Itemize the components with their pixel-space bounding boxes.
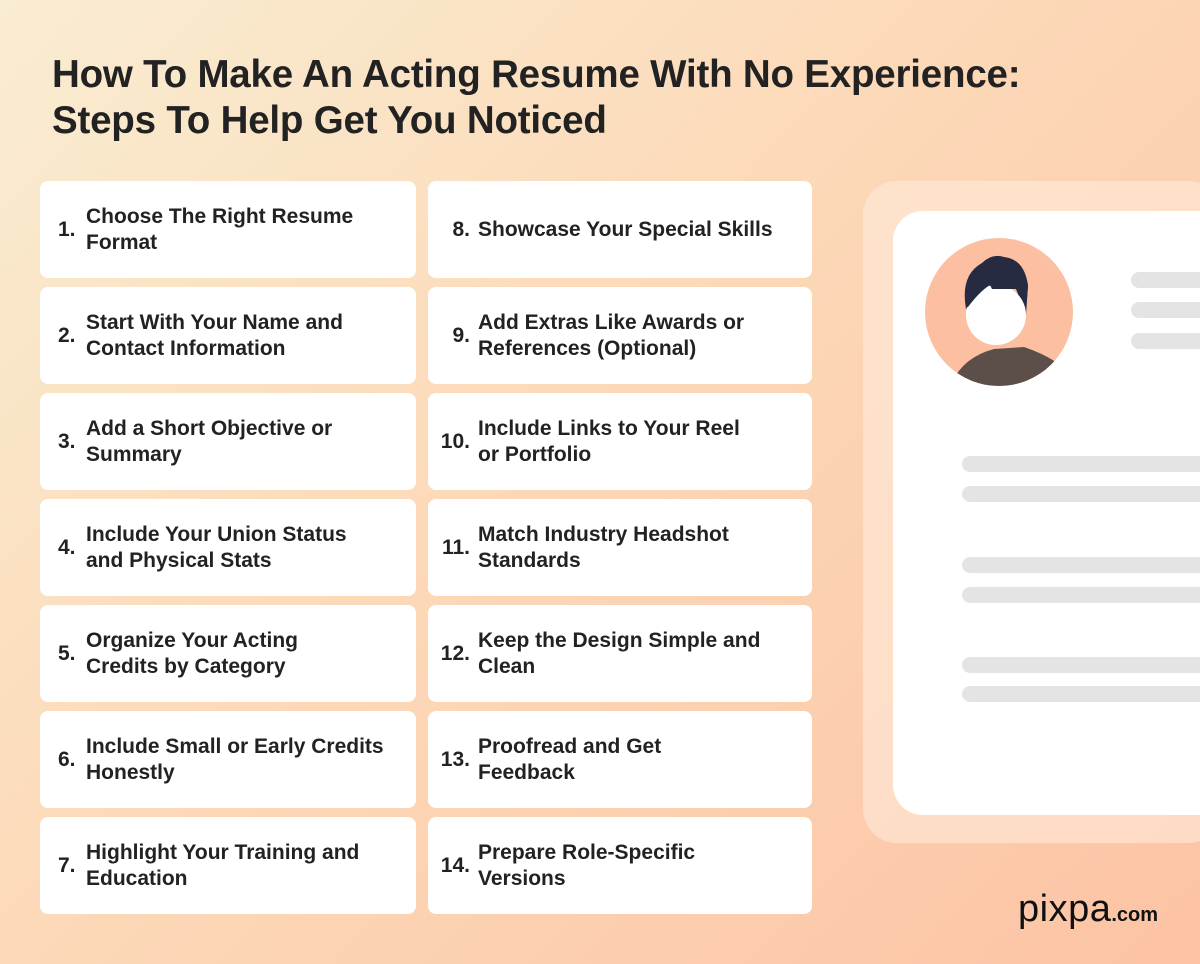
card 2 <box>40 287 416 384</box>
card 8: 8. <box>452 218 470 240</box>
card 3 <box>40 393 416 490</box>
card 9: Add Extras Like Awards or <box>478 310 744 334</box>
card 14 <box>428 817 812 914</box>
card 7: Education <box>86 866 188 890</box>
card 11: 11. <box>442 536 470 558</box>
card 13: 13. <box>441 748 470 770</box>
card 10: Include Links to Your Reel <box>478 416 740 440</box>
card 3: 3. <box>58 430 76 452</box>
card 3: Add a Short Objective or <box>86 416 332 440</box>
card 4 <box>40 499 416 596</box>
card 5: 5. <box>58 642 76 664</box>
card 1: Format <box>86 230 157 254</box>
card 9 <box>428 287 812 384</box>
card 10: or Portfolio <box>478 442 591 466</box>
card 11 <box>428 499 812 596</box>
card 8: Showcase Your Special Skills <box>478 218 773 240</box>
card 7: 7. <box>58 854 76 876</box>
text lines <box>1131 272 1200 288</box>
card 12: Keep the Design Simple and <box>478 628 760 652</box>
card 10 <box>428 393 812 490</box>
card 13: Feedback <box>478 760 575 784</box>
card 6 <box>40 711 416 808</box>
card 5: Credits by Category <box>86 654 286 678</box>
card 4: 4. <box>58 536 76 558</box>
card 11: Match Industry Headshot <box>478 522 729 546</box>
card 6: 6. <box>58 748 76 770</box>
card 10: 10. <box>441 430 470 452</box>
card 12: Clean <box>478 654 535 678</box>
card 1: Choose The Right Resume <box>86 204 353 228</box>
card 13 <box>428 711 812 808</box>
card 12 <box>428 605 812 702</box>
card 7 <box>40 817 416 914</box>
card 2: Contact Information <box>86 336 286 360</box>
card 14: 14. <box>441 854 470 876</box>
card 4: Include Your Union Status <box>86 522 347 546</box>
title: Steps To Help Get You Noticed <box>52 99 607 142</box>
card 6: Honestly <box>86 760 175 784</box>
icon: avatar <box>925 238 1073 386</box>
card 5: Organize Your Acting <box>86 628 298 652</box>
card 7: Highlight Your Training and <box>86 840 359 864</box>
card 3: Summary <box>86 442 182 466</box>
card 1 <box>40 181 416 278</box>
card 6: Include Small or Early Credits <box>86 734 384 758</box>
card 14: Versions <box>478 866 566 890</box>
card 2: 2. <box>58 324 76 346</box>
title <box>52 53 1020 142</box>
card 13: Proofread and Get <box>478 734 661 758</box>
card 12: 12. <box>441 642 470 664</box>
card 9: References (Optional) <box>478 336 696 360</box>
resume illustration <box>863 181 1200 843</box>
card 2: Start With Your Name and <box>86 310 343 334</box>
card 1: 1. <box>58 218 76 240</box>
card 4: and Physical Stats <box>86 548 272 572</box>
resume sheet <box>893 211 1200 815</box>
card 11: Standards <box>478 548 581 572</box>
card 14: Prepare Role-Specific <box>478 840 695 864</box>
title: How To Make An Acting Resume With No Experience: <box>52 53 1020 96</box>
logo: pixpa.com: pixpa.com <box>1018 888 1158 930</box>
card 5 <box>40 605 416 702</box>
card 9: 9. <box>452 324 470 346</box>
card 8 <box>428 181 812 278</box>
